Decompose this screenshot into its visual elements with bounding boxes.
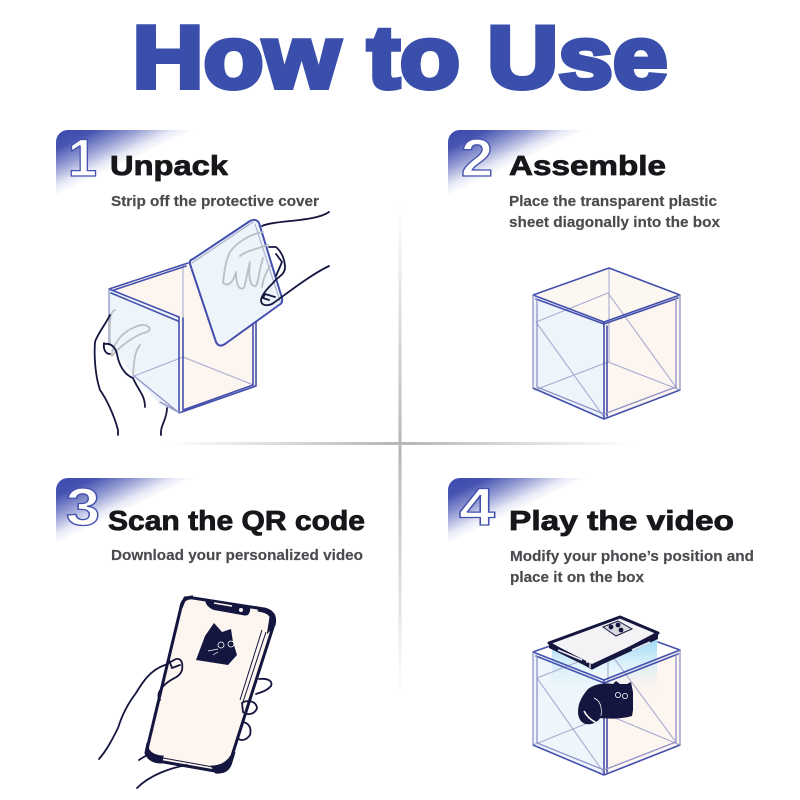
badge 1: 1 [68,129,97,188]
cat head on screen [196,623,237,665]
text: modify: Modify your phone’s position and [510,549,754,565]
panel: step 3 scan [56,478,365,788]
illustration: cube [533,268,680,419]
cat [578,681,633,724]
panel: step 4 play [448,478,754,775]
badge 4: 4 [459,478,496,537]
heading: scan: Scan the QR code [108,505,365,536]
panel: step 1 unpack [56,129,329,435]
phone on top [549,617,658,669]
vertical divider [398,205,402,695]
ghost hand lower [110,310,150,375]
heading: play: Play the video [509,505,734,536]
phone [147,598,274,771]
panel: step 2 assemble [448,129,720,419]
badge 2 [448,129,587,196]
horizontal divider [165,442,635,445]
light beam [552,640,657,690]
badge 3: 3 [66,478,100,537]
lower hand [95,315,167,435]
text: place sheet [509,194,720,231]
transparent sheet [190,220,282,346]
badge 2: 2 [461,129,493,188]
text: place sheet: sheet diagonally into the box [509,215,720,231]
heading: Unpack: Unpack [110,150,228,181]
text: download: Download your personalized video [111,548,363,564]
text: modify: place it on the box [510,570,644,586]
upper hand [261,212,329,305]
illustration: cube with phone and cat [533,617,680,775]
badge 3 [56,478,195,544]
badge 1 [56,129,195,196]
heading: Assemble: Assemble [509,150,666,181]
text: strip off: Strip off the protective cover [111,194,319,210]
illustration: phone in hand [99,597,275,788]
holding hand [99,659,271,788]
title: How to Use [132,8,668,106]
illustration: box with hands [95,212,329,435]
ghost hand upper [223,232,270,289]
text: modify [510,549,754,586]
badge 4 [448,478,587,544]
text: place sheet: Place the transparent plastic [509,194,717,210]
